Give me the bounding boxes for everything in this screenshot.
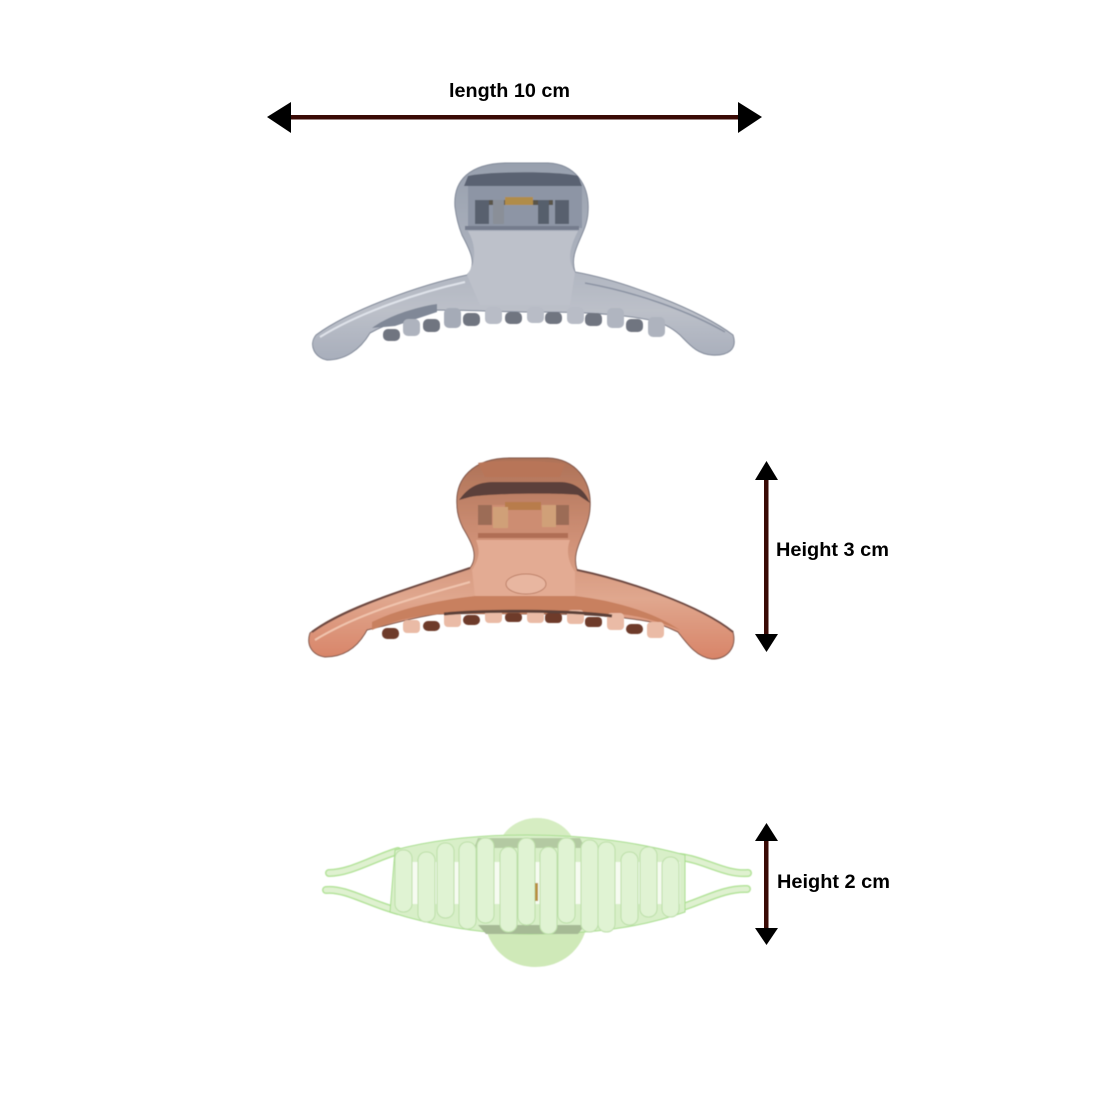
hinge (478, 502, 569, 528)
length label: length 10 cm (449, 81, 570, 102)
teeth (382, 610, 664, 639)
spring and hinge (475, 197, 569, 224)
height 3 cm arrow (755, 461, 778, 652)
teeth (383, 307, 665, 341)
grey hair claw clip (313, 163, 734, 360)
clip bars (395, 838, 679, 934)
green hair claw clip (326, 818, 748, 967)
logo (506, 574, 546, 594)
height 2 cm label: Height 2 cm (777, 872, 890, 893)
brown hair claw clip (309, 458, 734, 659)
height 3 cm label: Height 3 cm (776, 540, 889, 561)
height 2 cm arrow (755, 823, 778, 945)
length arrow (267, 102, 762, 133)
